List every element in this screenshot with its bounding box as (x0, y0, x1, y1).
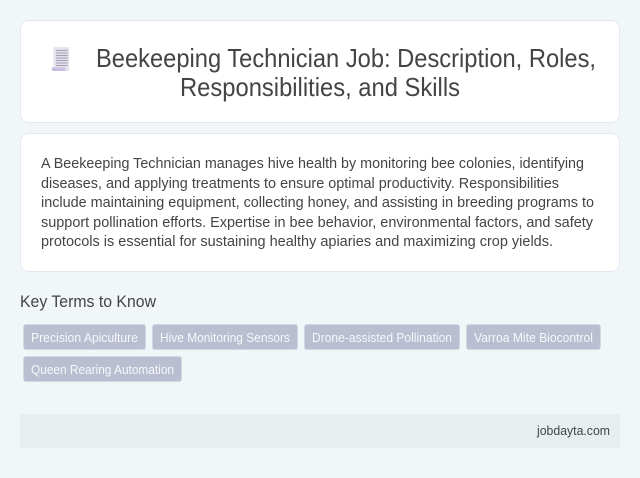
title: Beekeeping Technician Job: Description, Roles, (96, 45, 596, 73)
tag: Hive Monitoring Sensors (152, 324, 298, 350)
tag: Queen Rearing Automation (24, 356, 182, 382)
tag: Varroa Mite Biocontrol: Varroa Mite Biocontrol (474, 330, 593, 345)
panel: title header (20, 20, 620, 122)
tag: Precision Apiculture (24, 324, 146, 350)
tag: Varroa Mite Biocontrol (466, 324, 600, 350)
tag: Drone-assisted Pollination (304, 324, 460, 350)
description text: protocols is essential for sustaining healthy apiaries and maximizing crop yields. (41, 234, 553, 250)
title (96, 45, 596, 102)
tag: Hive Monitoring Sensors: Hive Monitoring Sensors (160, 330, 290, 345)
description text: support pollination efforts. Expertise in bee behavior, environmental factors, and safety (41, 215, 594, 231)
description text: diseases, and applying treatments to ensure optimal productivity. Responsibilities (41, 176, 559, 192)
description text (41, 156, 594, 250)
panel: description (20, 134, 620, 272)
heading: key terms: Key Terms to Know (20, 293, 156, 311)
title: Responsibilities, and Skills (180, 74, 460, 102)
description text: include maintaining equipment, collecting honey, and assisting in breeding programs to (41, 195, 594, 211)
tag: Queen Rearing Automation: Queen Rearing Automation (31, 362, 174, 377)
key terms tags (24, 324, 600, 382)
footer source text: jobdayta.com (536, 424, 610, 438)
description text: A Beekeeping Technician manages hive health by monitoring bee colonies, identifying (41, 156, 584, 172)
footer (20, 414, 620, 448)
icon: document scroll (52, 47, 69, 71)
tag: Precision Apiculture: Precision Apiculture (31, 330, 138, 345)
tag: Drone-assisted Pollination: Drone-assisted Pollination (312, 330, 452, 345)
